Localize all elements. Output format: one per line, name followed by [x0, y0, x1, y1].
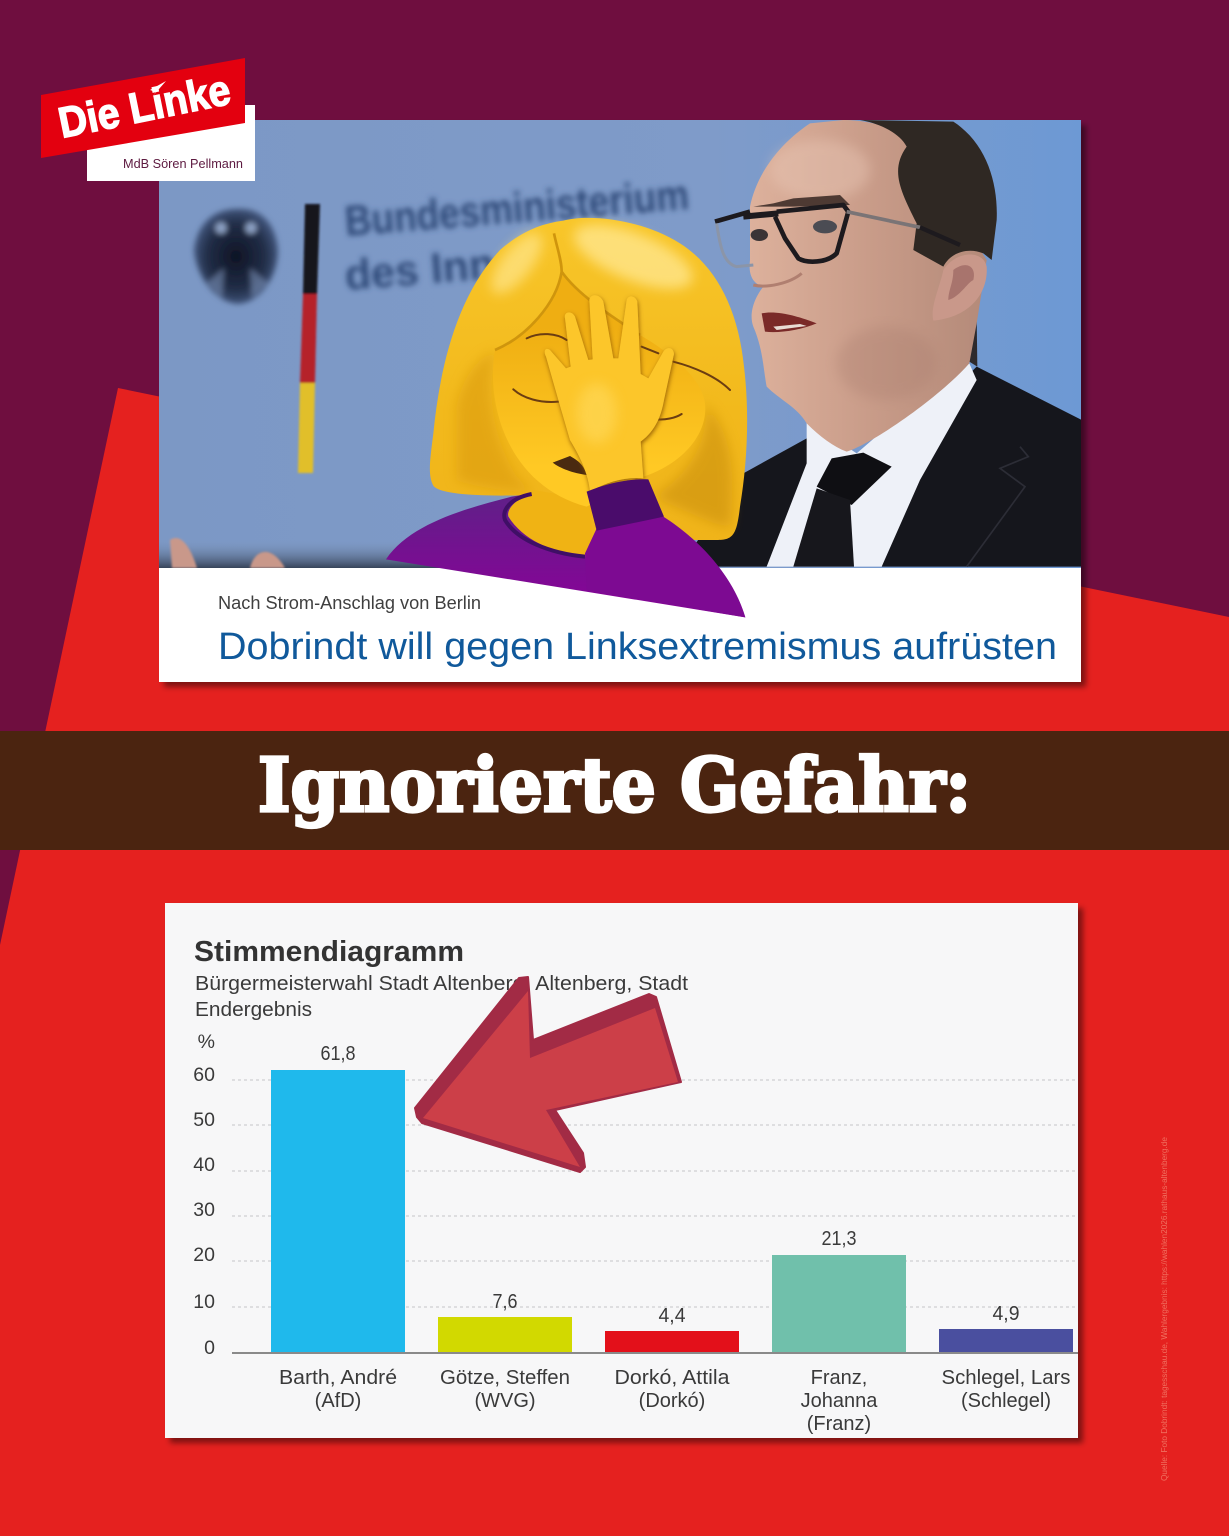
logo MdB name: MdB Sören Pellmann: [123, 157, 243, 171]
bar values: 7,6: [492, 1291, 518, 1313]
glasses: [715, 205, 960, 267]
collar: [504, 494, 585, 557]
ear: [933, 255, 987, 321]
bang edge crease: [495, 233, 640, 350]
grid lines: [232, 1080, 1078, 1307]
stubble shadow: [840, 332, 913, 394]
neck back shadow: [970, 322, 978, 366]
chart subtitle: Endergebnis: [195, 998, 312, 1021]
bar labels: (Schlegel): [961, 1390, 1051, 1412]
y axis labels: 10: [193, 1291, 215, 1313]
y axis labels: 0: [204, 1337, 215, 1359]
bar values: 21,3: [822, 1228, 856, 1250]
eyes: [751, 229, 768, 241]
y axis labels: 30: [193, 1199, 215, 1221]
heading band: [0, 731, 1229, 850]
blurred ministry sign text: [342, 179, 692, 294]
hair: [860, 120, 997, 267]
logo white plate: [87, 105, 255, 181]
bar values: 61,8: [320, 1043, 356, 1065]
icon: blurred federal eagle: [194, 209, 278, 304]
caption kicker: Nach Strom-Anschlag von Berlin: [218, 593, 481, 613]
bars: [271, 1070, 1073, 1352]
cuff: [587, 479, 664, 531]
y axis labels: [193, 1031, 215, 1359]
logo red banner: [41, 58, 245, 158]
bar values: 4,4: [658, 1305, 686, 1327]
y axis labels: 50: [193, 1109, 215, 1131]
hand highlight: [577, 383, 617, 443]
y axis labels: 20: [193, 1244, 215, 1266]
bar labels: Götze, Steffen: [440, 1367, 570, 1389]
hair: [430, 218, 747, 540]
face: [493, 272, 705, 507]
lapel: [967, 447, 1028, 567]
chart subtitle: Bürgermeisterwahl Stadt Altenberg, Altenberg, Stadt: [195, 972, 688, 995]
eyebrow: [753, 195, 850, 207]
bar labels: Barth, André: [279, 1367, 397, 1389]
tie: [817, 453, 892, 505]
bar labels: Johanna: [801, 1390, 878, 1412]
icon: facepalm emoji: [386, 211, 747, 617]
chart card: [165, 903, 1078, 1438]
shirt: [767, 363, 977, 567]
chart subtitle: [195, 972, 688, 1021]
caption headline: Dobrindt will gegen Linksextremismus aufrüsten: [218, 626, 1057, 668]
bar values: 4,9: [992, 1303, 1020, 1325]
head: [750, 120, 987, 452]
bar labels: [279, 1367, 1070, 1435]
source credit: Quelle: Foto Dobrindt: tagesschau.de, Wahlergebnis: https://wahlen2026.rathaus-altenberg.de: [1160, 1137, 1169, 1481]
hair highlights: [566, 211, 701, 302]
bar labels: Schlegel, Lars: [942, 1367, 1070, 1389]
hand: [545, 295, 674, 492]
heading: Ignorierte Gefahr:: [258, 743, 971, 829]
y axis labels: 60: [193, 1064, 215, 1086]
brows, eyes, mouth: [513, 334, 730, 419]
red diagonal background shape: [0, 388, 1229, 1536]
panel: vote chart: [165, 903, 1078, 1438]
bar labels: Dorkó, Attila: [614, 1367, 730, 1389]
bar labels: (WVG): [474, 1390, 536, 1412]
bar values: [320, 1043, 1020, 1327]
bar labels: (Dorkó): [639, 1390, 705, 1412]
sleeve: [585, 517, 745, 617]
man in suit: [680, 120, 1082, 567]
chart title: Stimmendiagramm: [194, 936, 464, 968]
photo: ministry backdrop: [159, 120, 1082, 568]
y axis labels: %: [198, 1031, 215, 1053]
bar labels: (Franz): [807, 1413, 871, 1435]
logo: Die Linke: [41, 58, 255, 181]
blurred ministry sign text: Bundesministerium: [343, 171, 691, 246]
lectern shadow and hand: [159, 546, 439, 568]
x axis: [232, 1352, 1078, 1354]
logo wordmark: Die Linke: [54, 66, 235, 148]
suit: [696, 438, 807, 567]
hair shadow right of face: [653, 403, 732, 527]
blurred ministry sign text: des Innern: [343, 235, 564, 300]
bar labels: (AfD): [315, 1390, 361, 1412]
panel: news screenshot: [159, 120, 1082, 682]
hair shadow left of face: [457, 350, 533, 493]
forehead highlight: [770, 140, 870, 200]
arrow pointing to AfD bar: [415, 977, 681, 1172]
flag bar: [298, 204, 320, 473]
torso: [386, 493, 745, 617]
bar labels: Franz,: [811, 1367, 867, 1389]
neck: [505, 490, 592, 562]
y axis labels: 40: [193, 1154, 215, 1176]
logo bird mark: [150, 81, 166, 97]
photo card backing: [159, 120, 1081, 682]
mouth: [762, 312, 817, 332]
nose shadow: [753, 273, 802, 286]
